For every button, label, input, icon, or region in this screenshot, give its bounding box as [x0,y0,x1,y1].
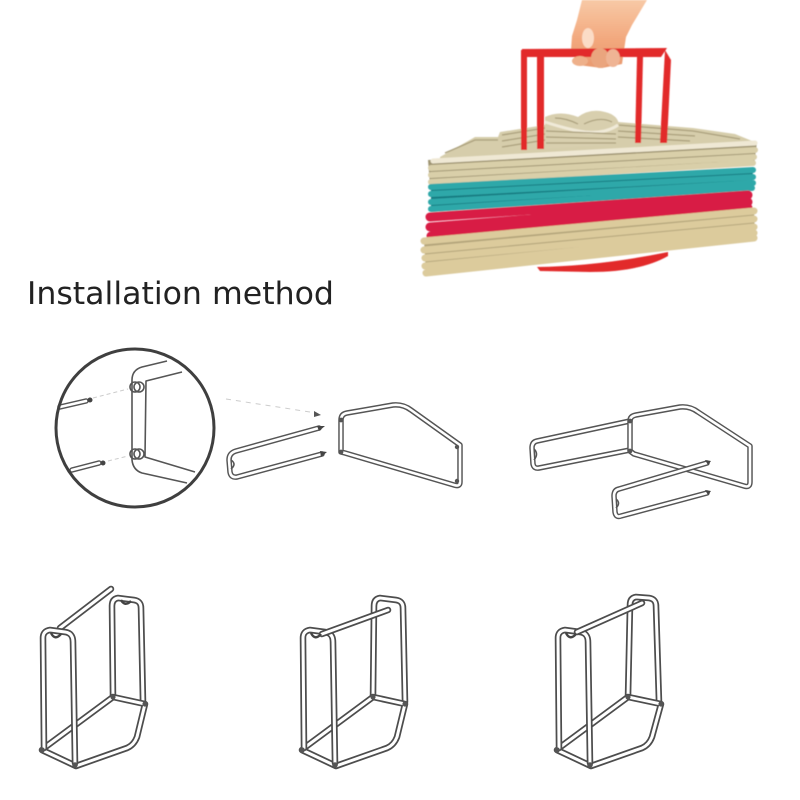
red carrier frame [521,48,671,150]
fingers on the handle [572,28,620,68]
teal hanger stack [431,169,753,212]
dotted arrow [226,399,321,417]
red handle below the stack [537,252,668,272]
bottom cream hanger stack [424,210,755,274]
photo: hand carrying stacked hangers [424,0,757,274]
step 2: assembled frame with second rod [532,407,750,516]
step 1: magnified detail circle [56,349,214,507]
step 1: hanger base frame [339,405,460,486]
red hanger stack [430,195,748,236]
back of the top hanger stack [440,122,757,162]
title: Installation method [27,276,334,312]
pins in circle [60,398,106,470]
hand [571,0,647,68]
dotted guide lines [93,389,128,461]
heart hanger stack [545,111,619,149]
step 1: U-shaped rod [229,426,327,477]
circle outline [56,349,214,507]
step 4: frame with rod nearly seated [299,598,408,768]
step 5: finished frame [554,597,664,768]
stripes inside hanger stack [445,125,740,153]
top cream hanger stack [428,142,757,185]
frame corner in circle [130,361,195,483]
step 3: frame with rod inserted at angle [39,589,148,768]
